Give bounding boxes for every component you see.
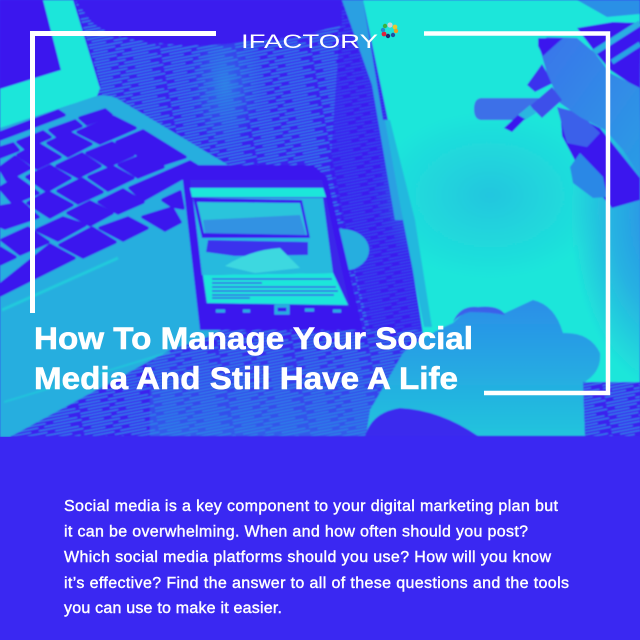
title: How To Manage Your Social [34,320,473,356]
phone screen [190,180,350,307]
white frame, bottom right bracket [424,34,608,393]
photo: desk with laptop, phone and notebook [0,0,640,437]
keyboard keys [0,110,200,295]
phone article text lines [212,279,338,298]
notebook paper [342,0,640,390]
hand with ring [365,300,600,436]
title: Media And Still Have A Life [34,360,458,396]
laptop keyboard base [0,95,345,437]
ring [453,307,505,322]
body paragraph: Which social media platforms should you use? How will you know [64,549,551,566]
coffee mug shadow [75,0,342,46]
sleeve [365,408,478,436]
laptop screen bezel [0,0,100,128]
lower text panel background [0,436,640,640]
body paragraph: it can be overwhelming. When and how often should you post? [64,524,528,540]
laptop corner seen beside phone [315,229,369,271]
writing hand with pen [504,22,640,208]
logo wordmark: IFACTORY [241,31,378,53]
object behind pen [474,98,545,120]
body paragraph: it’s effective? Find the answer to all of these questions and the tools [64,575,569,592]
logo icon: colour dots [381,22,398,38]
phone nav icons [216,306,341,313]
wooden desk [0,0,640,436]
title [34,320,473,396]
body paragraph [64,498,569,617]
white frame, top left bracket [32,34,216,313]
body paragraph: Social media is a key component to your digital marketing plan but [64,498,559,515]
smartphone [182,165,363,330]
desk strip lower right [583,382,640,436]
body paragraph: you can use to make it easier. [64,600,282,617]
